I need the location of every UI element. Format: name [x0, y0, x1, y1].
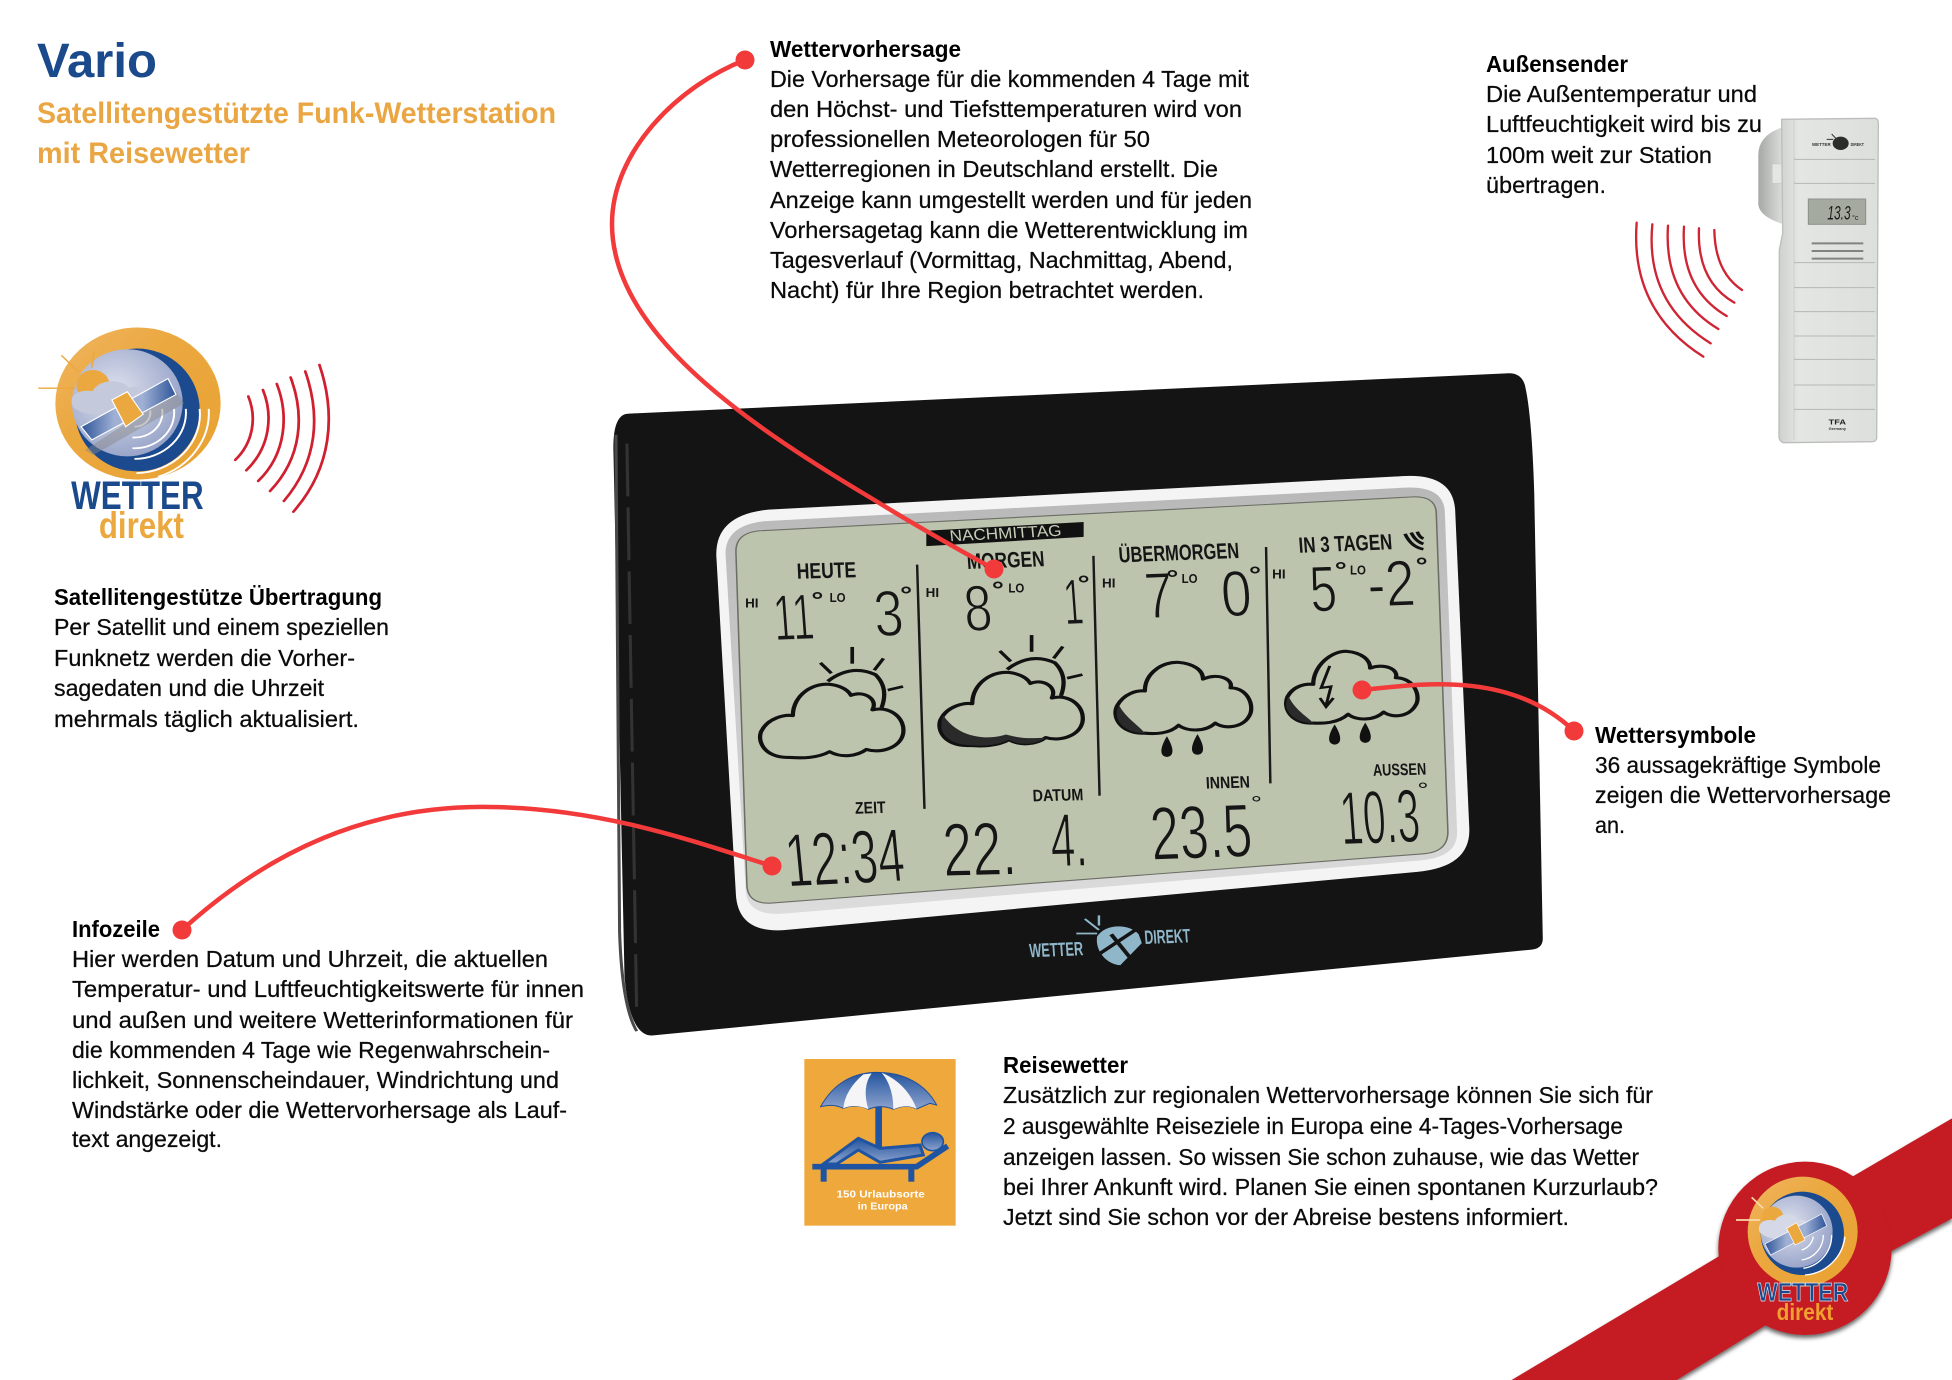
degree signs: ° — [900, 582, 912, 607]
degree signs: ° — [1335, 558, 1347, 582]
subtitle: Satellitengestützte Funk-Wetterstation — [37, 97, 556, 130]
icon: radio waves from transmitter — [1636, 223, 1742, 357]
text block: Wettervorhersage: professionellen Meteorologen für 50 — [770, 126, 1150, 152]
HI LO labels: LO — [1008, 582, 1024, 596]
text block: Infozeile — [72, 916, 584, 1152]
degree signs: ° — [1166, 566, 1179, 590]
text block: Außensender: Die Außentemperatur und — [1486, 81, 1757, 107]
text block: Reisewetter: 2 ausgewählte Reiseziele in Europa eine 4-Tages-Vorhersage — [1003, 1113, 1623, 1139]
icon: sun behind shaded cloud (tomorrow) — [939, 635, 1083, 746]
subtitle — [37, 97, 556, 170]
HI LO labels: LO — [1350, 564, 1366, 578]
HI LO labels: HI — [1102, 577, 1115, 591]
info row values: 23.5 — [1147, 789, 1255, 876]
degree signs: ° — [1078, 571, 1090, 596]
logo: Wetter direkt with satellite — [38, 327, 221, 547]
info row degree signs: ° — [1417, 779, 1429, 802]
weather station device — [613, 373, 1543, 1036]
info row degree signs — [1251, 779, 1429, 815]
HI LO labels: HI — [745, 597, 759, 611]
badge logo: direkt — [1777, 1299, 1834, 1325]
forecast temperatures: 0 — [1218, 557, 1254, 631]
text block: Wettervorhersage: Wetterregionen in Deutschland erstellt. Die — [770, 156, 1218, 182]
text block: Infozeile: text angezeigt. — [72, 1126, 222, 1152]
day headings: IN 3 TAGEN — [1298, 529, 1393, 558]
text block: Satellitengestützte Übertragung: Satellitengestütze Übertragung — [54, 584, 382, 610]
text block: Außensender: Außensender — [1486, 51, 1628, 77]
info row labels — [855, 761, 1427, 818]
text block: Reisewetter: bei Ihrer Ankunft wird. Planen Sie einen spontanen Kurzurlaub? — [1003, 1174, 1658, 1200]
callout line: Wettersymbole — [1362, 684, 1574, 731]
transmitter brand marks: DIREKT — [1851, 142, 1864, 147]
icon: sun behind cloud (today) — [760, 647, 903, 758]
day headings: HEUTE — [796, 557, 857, 584]
icon: thunderstorm cloud (in 3 days) — [1286, 651, 1418, 745]
callout dot: Wettervorhersage top — [736, 50, 754, 70]
HI LO labels: LO — [830, 591, 845, 605]
NACHMITTAG banner: NACHMITTAG — [949, 523, 1062, 545]
text block: Wettervorhersage: Die Vorhersage für die kommenden 4 Tage mit — [770, 66, 1250, 92]
text block: Wettersymbole — [1595, 722, 1891, 838]
info row degree signs: ° — [1251, 792, 1262, 815]
callout dot: Infozeile target — [762, 856, 782, 876]
icon: reception signal — [1405, 532, 1423, 549]
text block: Reisewetter — [1003, 1052, 1658, 1230]
text block: Infozeile: und außen und weitere Wetterinformationen für — [72, 1007, 573, 1033]
text block: Außensender: übertragen. — [1486, 172, 1606, 198]
text block: Wettervorhersage: Anzeige kann umgestellt werden und für jeden — [770, 187, 1252, 213]
HI LO labels: LO — [1182, 572, 1198, 586]
icon: Reisewetter beach badge: in Europa — [858, 1201, 908, 1212]
transmitter LCD: 13.3 — [1827, 203, 1851, 224]
callout dot: Wettervorhersage target — [984, 560, 1004, 578]
text block: Infozeile: Hier werden Datum und Uhrzeit, die aktuellen — [72, 946, 548, 972]
text block: Infozeile: Windstärke oder die Wettervorhersage als Lauf- — [72, 1097, 567, 1123]
title: Vario — [37, 35, 157, 88]
device body — [613, 373, 1543, 1036]
text block: Wettervorhersage: Tagesverlauf (Vormittag, Nachmittag, Abend, — [770, 247, 1233, 273]
column dividers — [917, 547, 1270, 809]
silver bezel — [716, 476, 1469, 930]
text block: Wettervorhersage: Wettervorhersage — [770, 36, 961, 62]
info row values: 4. — [1049, 798, 1089, 883]
HI LO labels — [745, 564, 1366, 611]
degree signs: ° — [1249, 562, 1261, 587]
callout dot: Infozeile label — [172, 920, 192, 940]
info row values: 12:34 — [781, 813, 908, 903]
text block: Reisewetter: Jetzt sind Sie schon vor der Abreise bestens informiert. — [1003, 1204, 1569, 1230]
text block: Wettersymbole: an. — [1595, 812, 1625, 838]
degree signs: ° — [1415, 553, 1428, 578]
icon: Reisewetter beach badge: 150 Urlaubsorte — [836, 1190, 925, 1201]
text block: Außensender: Luftfeuchtigkeit wird bis zu — [1486, 111, 1762, 137]
day headings: ÜBERMORGEN — [1118, 538, 1240, 567]
LCD screen — [736, 497, 1448, 903]
transmitter LCD: °c — [1852, 213, 1859, 222]
callout line: Wettervorhersage — [612, 60, 994, 569]
text block: Reisewetter: Reisewetter — [1003, 1052, 1128, 1078]
icon: rain cloud (day after tomorrow) — [1115, 662, 1251, 757]
day headings — [796, 529, 1393, 584]
text block: Wettervorhersage: Nacht) für Ihre Region betrachtet werden. — [770, 277, 1204, 303]
badge logo — [1736, 1177, 1858, 1325]
forecast temperatures: 11 — [771, 580, 816, 654]
forecast temperatures: 7 — [1142, 559, 1175, 632]
transmitter brand marks — [1812, 134, 1864, 431]
text block: Satellitengestützte Übertragung: Per Satellit und einem speziellen — [54, 614, 389, 640]
text block: Infozeile: die kommenden 4 Tage wie Regenwahrschein- — [72, 1037, 550, 1063]
callout dot: Wettersymbole label — [1564, 722, 1584, 740]
subtitle: mit Reisewetter — [37, 137, 250, 170]
weather station device: 10.3 — [1337, 774, 1423, 861]
logo: Wetter direkt with satellite: WETTER — [71, 473, 204, 517]
text block: Wettervorhersage: den Höchst- und Tiefsttemperaturen wird von — [770, 96, 1242, 122]
text block: Wettersymbole: Wettersymbole — [1595, 722, 1756, 748]
degree signs: ° — [992, 577, 1004, 602]
info row labels: ZEIT — [855, 799, 887, 818]
forecast temperatures: 3 — [871, 577, 906, 650]
text block: Satellitengestützte Übertragung: sagedaten und die Uhrzeit — [54, 675, 325, 701]
text block: Satellitengestützte Übertragung: Funknetz werden die Vorher- — [54, 645, 355, 671]
transmitter brand marks: WETTER — [1812, 142, 1832, 147]
transmitter LCD — [1808, 199, 1866, 224]
text block: Wettersymbole: zeigen die Wettervorhersage — [1595, 782, 1891, 808]
icon: radio waves from satellite — [235, 365, 329, 512]
info row labels: INNEN — [1205, 774, 1250, 793]
text block: Reisewetter: Zusätzlich zur regionalen Wettervorhersage können Sie sich für — [1003, 1082, 1653, 1108]
transmitter brand marks: Germany — [1829, 427, 1847, 431]
text block: Infozeile: lichkeit, Sonnenscheindauer, Windrichtung und — [72, 1067, 559, 1093]
logo: Wetter direkt with satellite: direkt — [99, 506, 184, 547]
text block: Wettersymbole: 36 aussagekräftige Symbole — [1595, 752, 1881, 778]
info row labels: AUSSEN — [1373, 761, 1427, 780]
info row labels: DATUM — [1032, 786, 1084, 806]
text block: Wettervorhersage — [770, 36, 1252, 303]
badge logo: WETTER — [1757, 1277, 1849, 1307]
forecast temperatures — [771, 547, 1418, 654]
callout line: Infozeile — [182, 807, 772, 930]
transmitter brand marks: TFA — [1829, 418, 1847, 427]
forecast temperatures: -2 — [1365, 547, 1418, 621]
day headings: MORGEN — [966, 546, 1045, 574]
device logo — [1029, 915, 1191, 965]
text block: Reisewetter: anzeigen lassen. So wissen Sie schon zuhause, wie das Wetter — [1003, 1144, 1639, 1170]
red corner band with badge — [1512, 1118, 1952, 1380]
forecast temperatures: 5 — [1307, 552, 1339, 626]
callout dot: Wettersymbole target — [1352, 680, 1372, 700]
HI LO labels: HI — [926, 586, 939, 601]
forecast temperatures: 1 — [1061, 565, 1086, 639]
text block: Satellitengestützte Übertragung: mehrmals täglich aktualisiert. — [54, 706, 359, 732]
info row values: 22. — [941, 807, 1018, 893]
HI LO labels: HI — [1272, 568, 1286, 582]
title block — [37, 35, 556, 170]
device logo: WETTER — [1029, 938, 1084, 961]
text block: Infozeile: Infozeile — [72, 916, 160, 942]
info row values — [781, 774, 1423, 903]
degree signs: ° — [811, 588, 823, 612]
text block: Satellitengestützte Übertragung — [54, 584, 389, 732]
outdoor transmitter — [1758, 118, 1878, 443]
icon: Reisewetter beach badge — [804, 1059, 956, 1226]
forecast temperatures: 8 — [961, 572, 995, 645]
text block: Infozeile: Temperatur- und Luftfeuchtigkeitswerte für innen — [72, 976, 584, 1002]
weather station device: DIREKT — [1144, 925, 1191, 948]
text block: Wettervorhersage: Vorhersagetag kann die Wetterentwicklung im — [770, 217, 1248, 243]
degree signs — [811, 553, 1428, 612]
text block: Außensender — [1486, 51, 1762, 198]
text block: Außensender: 100m weit zur Station — [1486, 142, 1712, 168]
